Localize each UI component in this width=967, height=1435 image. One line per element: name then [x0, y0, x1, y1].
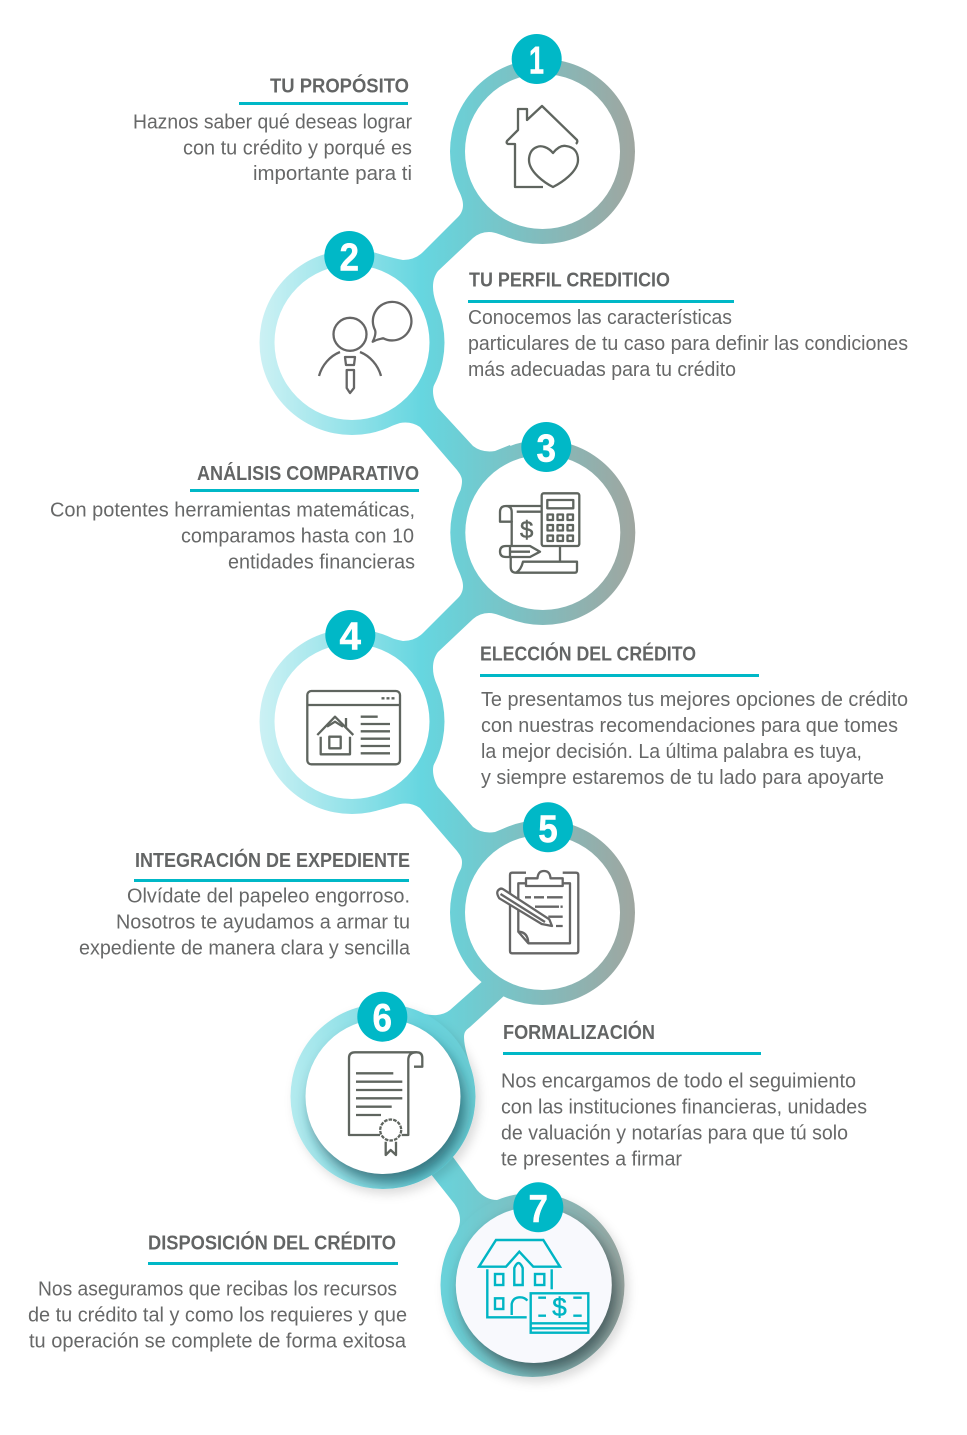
heading: Integración de expediente: INTEGRACIÓN DE EXPEDIENTE: [135, 848, 410, 872]
number badge 5: 5: [538, 808, 558, 851]
body: Disposición del crédito: de tu crédito tal y como los requieres y que: [28, 1304, 407, 1326]
icon: clipboard and pencil: [497, 871, 578, 953]
text block: Análisis comparativo: [50, 462, 419, 573]
text block: Tu propósito: [133, 74, 412, 185]
icon banknote dollar sign: $: [552, 1292, 567, 1322]
icon: house and banknote: [479, 1240, 588, 1333]
step 6 circle: [290, 992, 476, 1189]
heading: Tu perfil crediticio: TU PERFIL CREDITICIO: [469, 270, 670, 292]
body: Integración de expediente: Olvídate del papeleo engorroso.: [127, 885, 410, 907]
connecting bands between circles: [352, 152, 543, 1285]
heading: Elección del crédito: ELECCIÓN DEL CRÉDITO: [480, 641, 696, 665]
body: Tu propósito: con tu crédito y porqué es: [183, 137, 412, 159]
step 3 circle: [450, 422, 635, 625]
step 2 circle: [260, 231, 444, 435]
number badge 5: [523, 802, 573, 852]
body: Análisis comparativo: Con potentes herramientas matemáticas,: [50, 499, 415, 521]
body: Formalización: con las instituciones financieras, unidades: [501, 1096, 867, 1118]
icon: calculator and bill: [500, 493, 579, 573]
step 7 circle: [440, 1182, 624, 1377]
text block: Formalización: [501, 1020, 867, 1170]
body: Análisis comparativo: entidades financieras: [228, 551, 415, 573]
body: Disposición del crédito: tu operación se complete de forma exitosa: [29, 1330, 407, 1352]
icon: person with speech bubble: [319, 302, 411, 393]
body: Tu propósito: [133, 111, 412, 185]
number badge 3: 3: [536, 428, 556, 470]
body: Formalización: Nos encargamos de todo el seguimiento: [501, 1070, 856, 1092]
number badge 7: [513, 1182, 563, 1232]
body: Tu perfil crediticio: [468, 307, 908, 381]
body: Integración de expediente: expediente de manera clara y sencilla: [79, 937, 411, 959]
number badge 7: 7: [528, 1188, 548, 1231]
heading: Tu propósito: TU PROPÓSITO: [270, 74, 409, 98]
body: Elección del crédito: [481, 689, 908, 789]
icon dollar sign: $: [520, 517, 533, 544]
number badge 6: 6: [372, 997, 392, 1040]
step 4 circle: [260, 610, 444, 814]
number badge 3: [521, 422, 571, 472]
heading: Disposición del crédito: DISPOSICIÓN DEL CRÉDITO: [148, 1230, 396, 1254]
heading: Formalización: FORMALIZACIÓN: [503, 1020, 655, 1044]
step 5 circle: [450, 802, 635, 1005]
icon: document with seal: [349, 1052, 422, 1155]
body: Elección del crédito: con nuestras recomendaciones para que tomes: [481, 715, 898, 737]
icon: house with heart: [507, 106, 578, 187]
body: Tu perfil crediticio: más adecuadas para tu crédito: [468, 359, 736, 381]
number badge 6: [357, 992, 407, 1042]
body: Análisis comparativo: comparamos hasta con 10: [181, 525, 414, 547]
heading: Análisis comparativo: ANÁLISIS COMPARATIVO: [197, 462, 419, 485]
number badge 4: 4: [340, 616, 361, 658]
text block: Tu perfil crediticio: [468, 270, 908, 381]
body: Integración de expediente: Nosotros te ayudamos a armar tu: [116, 911, 410, 933]
body: Elección del crédito: y siempre estaremos de tu lado para apoyarte: [481, 767, 884, 789]
body: Tu propósito: importante para ti: [253, 163, 412, 185]
text block: Elección del crédito: [480, 641, 908, 789]
body: Elección del crédito: Te presentamos tus mejores opciones de crédito: [481, 689, 908, 711]
body: Disposición del crédito: [28, 1278, 407, 1352]
body: Tu perfil crediticio: particulares de tu caso para definir las condiciones: [468, 333, 908, 355]
text block: Disposición del crédito: [28, 1230, 407, 1352]
number badge 2: [324, 231, 374, 281]
step 1 circle: [450, 34, 635, 244]
number badge 1: [512, 34, 562, 84]
body: Formalización: te presentes a firmar: [501, 1148, 682, 1170]
body: Formalización: [501, 1070, 867, 1170]
icon: browser window with house: [307, 691, 400, 764]
body: Formalización: de valuación y notarías para que tú solo: [501, 1122, 848, 1144]
body: Integración de expediente: [79, 885, 411, 959]
body: Tu perfil crediticio: Conocemos las características: [468, 307, 732, 329]
body: Tu propósito: Haznos saber qué deseas lograr: [133, 111, 412, 133]
body: Disposición del crédito: Nos aseguramos que recibas los recursos: [38, 1278, 397, 1300]
body: Análisis comparativo: [50, 499, 415, 573]
number badge 4: [325, 610, 375, 660]
body: Elección del crédito: la mejor decisión. La última palabra es tuya,: [481, 741, 862, 763]
text block: Integración de expediente: [79, 848, 411, 959]
number badge 1: 1: [529, 40, 544, 82]
number badge 2: 2: [340, 236, 359, 280]
